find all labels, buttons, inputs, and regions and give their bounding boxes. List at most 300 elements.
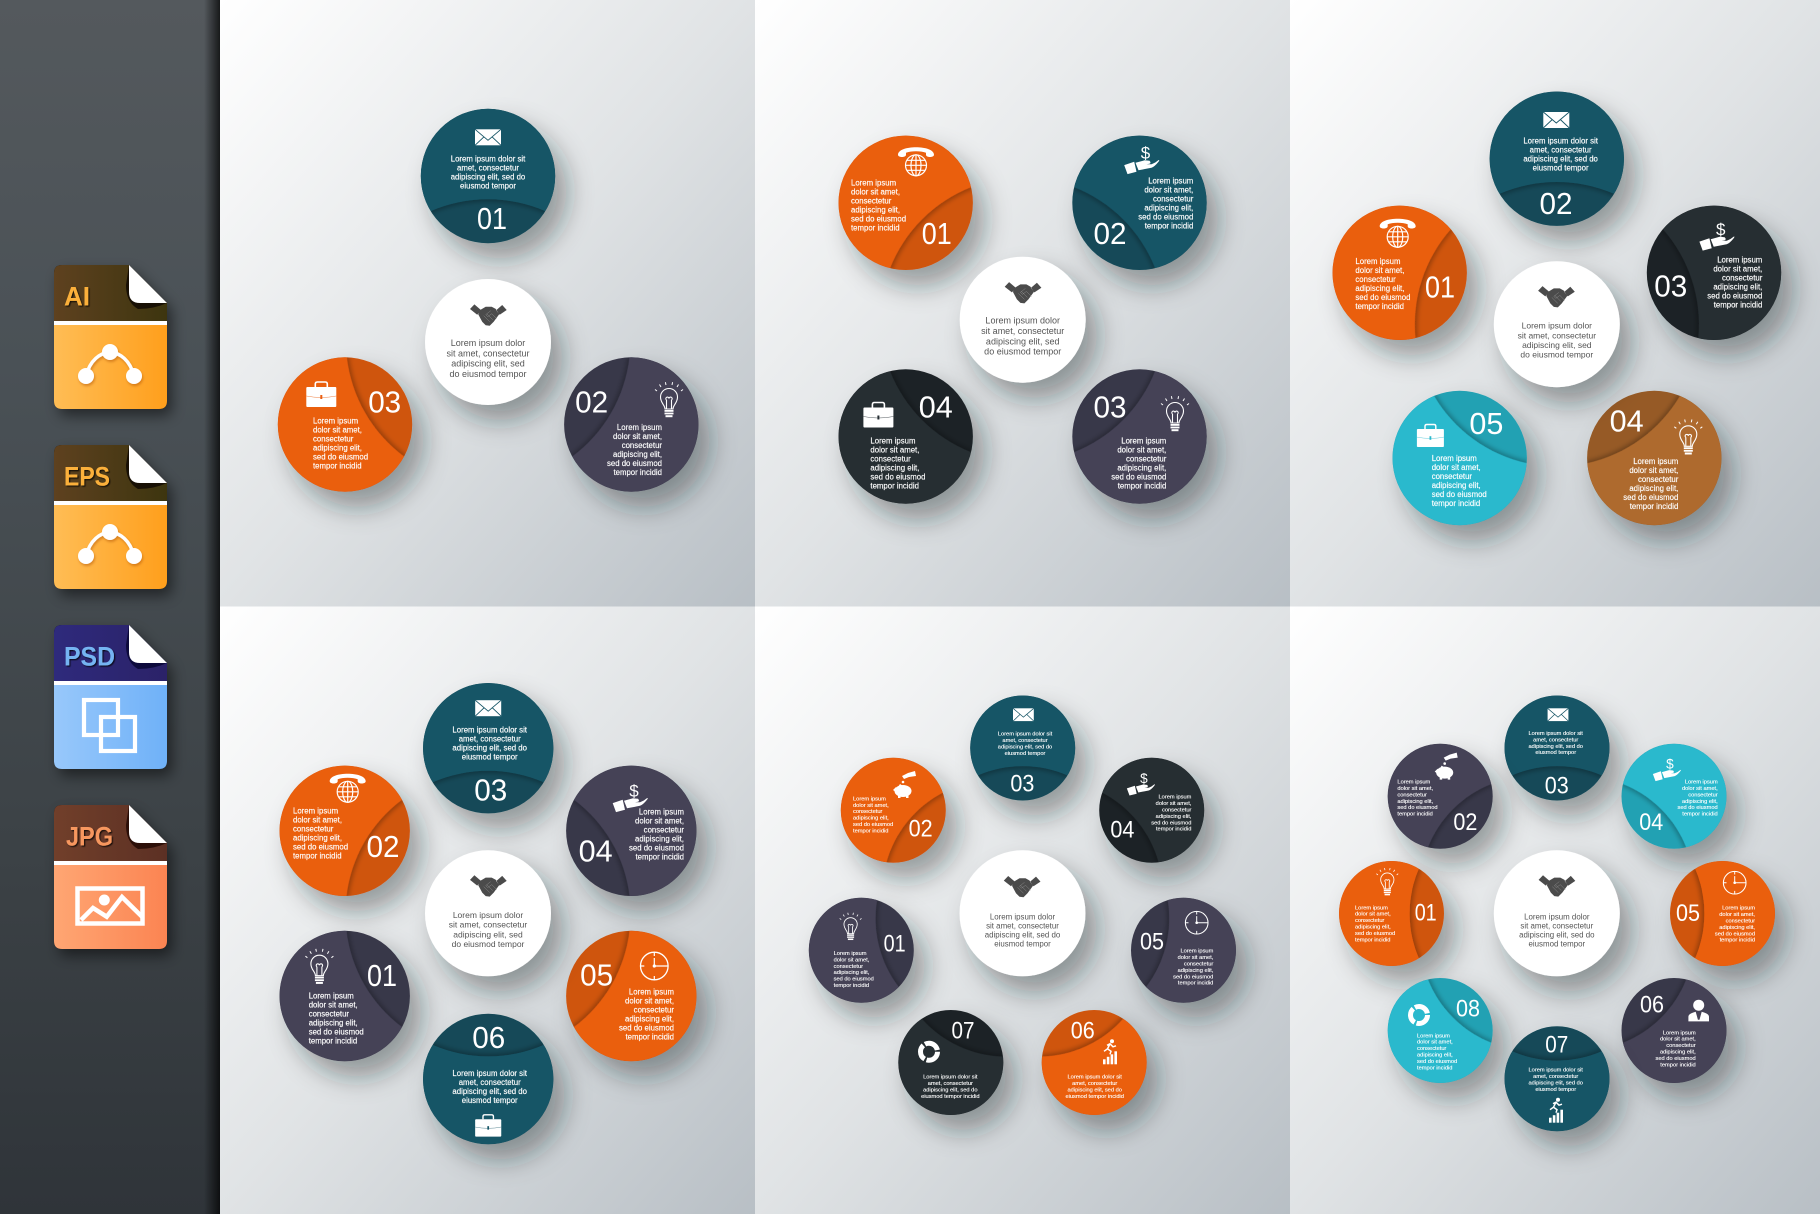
icon: cycle (1410, 1006, 1428, 1024)
text: tempor incidid (313, 461, 362, 470)
number: 02 (1453, 809, 1477, 836)
number: 03 (1010, 771, 1034, 798)
text: tempor incidid (613, 468, 662, 477)
text: do eiusmod tempor (984, 347, 1061, 357)
number: 05 (1676, 900, 1700, 927)
number: 02 (1540, 186, 1573, 221)
icon: hand with dollar (613, 782, 648, 812)
number: 06 (1640, 992, 1664, 1019)
text: consectetur (634, 1005, 674, 1014)
text: adipiscing elit, sed (1522, 340, 1592, 350)
text: adipiscing elit, sed do (1529, 1080, 1583, 1086)
text: amet, consectetur (457, 164, 519, 173)
icon: handshake (1539, 875, 1575, 897)
text: sed do eiusmod (313, 452, 368, 461)
text: dolor sit amet, (1417, 1040, 1453, 1046)
text: adipiscing elit, sed do (451, 173, 526, 182)
text: Lorem ipsum (1355, 905, 1388, 911)
number: 02 (367, 829, 400, 864)
icon: hand with dollar (1699, 220, 1734, 251)
text: adipiscing elit, (625, 1014, 674, 1023)
text: Lorem ipsum dolor (451, 338, 525, 348)
step 08 (1366, 974, 1497, 1105)
text: adipiscing elit, (1355, 284, 1404, 293)
text: tempor incidid (293, 851, 342, 860)
text: sed do eiusmod (1173, 974, 1213, 980)
text: amet, consectetur (459, 1078, 521, 1087)
text: adipiscing elit, (834, 970, 870, 976)
text: consectetur (853, 809, 883, 815)
text: eiusmod tempor (994, 939, 1051, 948)
text: Lorem ipsum (1663, 1030, 1696, 1036)
text: adipiscing elit, sed do (1068, 1088, 1122, 1094)
text: consectetur (313, 434, 354, 443)
text: Lorem ipsum dolor sit (1523, 137, 1599, 146)
text: Lorem ipsum dolor sit (451, 155, 526, 164)
step 02 (1490, 91, 1624, 226)
file icon: AI: AI (64, 282, 90, 312)
text: adipiscing elit, sed do (998, 744, 1052, 750)
text: sed do eiusmod (619, 1023, 674, 1032)
text: Lorem ipsum (1121, 437, 1166, 446)
icon: bulb (655, 382, 683, 417)
text: tempor incidid (870, 482, 919, 491)
step 01 (421, 109, 555, 243)
text: adipiscing elit, (1629, 484, 1678, 493)
text: Lorem ipsum (1685, 780, 1718, 786)
file icon: JPG: JPG (66, 822, 113, 852)
text: dolor sit amet, (613, 432, 662, 441)
text: adipiscing elit, sed do (985, 930, 1061, 939)
text: Lorem ipsum (617, 423, 662, 432)
text: consectetur (622, 441, 662, 450)
step 04 (1618, 722, 1748, 853)
text: Lorem ipsum (1717, 255, 1762, 264)
text: Lorem ipsum (1432, 454, 1477, 463)
text: dolor sit amet, (1719, 912, 1755, 918)
text: sit amet, consectetur (1520, 921, 1594, 930)
text: tempor incidid (851, 223, 900, 232)
text: Lorem ipsum dolor sit (998, 732, 1053, 738)
text: sit amet, consectetur (981, 326, 1064, 336)
number: 04 (1639, 809, 1663, 836)
step 05 (1131, 893, 1247, 1014)
text: tempor incidid (1720, 938, 1755, 944)
text: Lorem ipsum dolor sit (452, 726, 528, 735)
step 07 (881, 1010, 1010, 1132)
text: Lorem ipsum (834, 951, 867, 957)
text: dolor sit amet, (1117, 446, 1166, 455)
text: consectetur (1417, 1046, 1447, 1052)
text: consectetur (1432, 472, 1472, 481)
text: adipiscing elit, (613, 450, 662, 459)
icon: hand with dollar (1127, 771, 1155, 796)
text: tempor incidid (625, 1032, 674, 1041)
step 07 (1504, 1026, 1610, 1131)
text: tempor incidid (1714, 300, 1762, 309)
text: sit amet, consectetur (446, 348, 530, 358)
number: 03 (368, 385, 401, 420)
icon: briefcase (863, 402, 893, 428)
icon: briefcase (306, 382, 336, 407)
step 06 (1035, 1010, 1164, 1132)
text: adipiscing elit, (1397, 799, 1434, 805)
text: dolor sit amet, (1713, 264, 1762, 273)
step 03 (1647, 188, 1799, 348)
text: amet, consectetur (1072, 1081, 1117, 1087)
text: do eiusmod tempor (452, 939, 525, 949)
number: 02 (909, 816, 933, 843)
text: Lorem ipsum (1397, 780, 1431, 786)
icon: hand with dollar (1124, 144, 1159, 174)
text: dolor sit amet, (1660, 1037, 1696, 1043)
step 01 (811, 108, 978, 275)
text: Lorem ipsum dolor (985, 316, 1060, 326)
icon: handshake (1005, 282, 1041, 303)
number: 05 (580, 957, 613, 992)
text: sed do eiusmod (1432, 490, 1487, 499)
step 03 (1067, 364, 1235, 532)
text: adipiscing elit, sed (986, 336, 1059, 346)
text: Lorem ipsum dolor (1522, 321, 1592, 331)
text: tempor incidid (1682, 812, 1718, 818)
icon: clock (640, 952, 668, 980)
text: tempor incidid (1156, 827, 1191, 833)
text: tempor incidid (1118, 482, 1166, 491)
number: 03 (1545, 772, 1569, 799)
text: sed do eiusmod (607, 459, 662, 468)
text: adipiscing elit, (635, 834, 684, 843)
text: Lorem ipsum (639, 807, 684, 816)
number: 07 (1545, 1032, 1568, 1059)
text: sed do eiusmod (293, 842, 348, 851)
text: consectetur (1688, 792, 1718, 798)
icon: envelope (475, 700, 501, 716)
text: dolor sit amet, (635, 816, 684, 825)
number: 04 (1110, 817, 1134, 844)
file icon: JPG (54, 805, 167, 949)
text: tempor incidid (309, 1036, 357, 1045)
icon: runner (1103, 1039, 1117, 1064)
number: 05 (1140, 928, 1164, 955)
text: sed do eiusmod (309, 1027, 364, 1036)
number: 01 (922, 216, 952, 251)
icon: envelope (1013, 708, 1034, 721)
text: dolor sit amet, (1355, 912, 1391, 918)
step 04 (566, 742, 720, 904)
step 03 (970, 696, 1075, 800)
text: consectetur (1153, 195, 1194, 204)
text: tempor incidid (1145, 222, 1193, 231)
text: adipiscing elit, (1713, 282, 1762, 291)
text: dolor sit amet, (1156, 801, 1192, 807)
center circle (1494, 850, 1620, 976)
number: 04 (919, 389, 953, 424)
text: eiusmod tempor (1533, 164, 1589, 173)
text: Lorem ipsum (853, 796, 886, 802)
text: dolor sit amet, (851, 187, 900, 196)
step 04 (811, 364, 978, 532)
text: tempor incidid (1432, 499, 1480, 508)
text: consectetur (870, 455, 911, 464)
step 05 (1366, 390, 1535, 552)
text: Lorem ipsum (1417, 1033, 1450, 1039)
step 01 (256, 922, 410, 1085)
text: consectetur (309, 1009, 349, 1018)
file icon: PSD (54, 625, 167, 769)
icon: person (1688, 1000, 1709, 1021)
text: consectetur (1355, 275, 1396, 284)
text: adipiscing elit, (1355, 925, 1391, 930)
text: sed do eiusmod (1623, 493, 1678, 502)
text: Lorem ipsum (1722, 906, 1755, 912)
text: sit amet, consectetur (1518, 330, 1596, 340)
icon: piggy bank (1435, 753, 1458, 780)
icon: piggy bank (893, 771, 916, 798)
text: tempor incidid (1178, 981, 1213, 987)
text: Lorem ipsum dolor sit (452, 1069, 528, 1078)
number: 07 (951, 1018, 974, 1045)
text: tempor incidid (853, 828, 888, 834)
icon: bulb (840, 913, 862, 940)
file icon: EPS: EPS (64, 462, 110, 492)
text: consectetur (1355, 918, 1385, 924)
center circle (1494, 261, 1620, 387)
step 02 (1067, 108, 1235, 275)
text: dolor sit amet, (1629, 466, 1678, 475)
text: tempor incidid (1355, 302, 1404, 311)
step 04 (1579, 390, 1748, 552)
number: 03 (1654, 269, 1687, 304)
number: 08 (1456, 996, 1480, 1023)
text: eiusmod tempor (1535, 1087, 1576, 1093)
text: eiusmod tempor (462, 1096, 518, 1105)
text: dolor sit amet, (309, 1000, 358, 1009)
text: adipiscing elit, (1178, 968, 1214, 974)
number: 02 (575, 385, 608, 420)
text: sed do eiusmod (1355, 293, 1410, 302)
text: consectetur (1726, 918, 1755, 924)
number: 01 (477, 201, 507, 236)
text: do eiusmod tempor (1520, 350, 1593, 360)
text: Lorem ipsum (1633, 457, 1678, 466)
step 01 (1315, 188, 1467, 348)
text: sed do eiusmod (1111, 473, 1166, 482)
panel: eight steps (1290, 606, 1820, 1214)
text: consectetur (1184, 962, 1213, 968)
text: sed do eiusmod (1707, 291, 1762, 300)
text: amet, consectetur (1533, 1074, 1578, 1080)
text: adipiscing elit, sed do (452, 1087, 528, 1096)
text: sed do eiusmod (1355, 931, 1395, 937)
icon: briefcase (475, 1115, 501, 1137)
text: sed do eiusmod (1678, 805, 1718, 811)
text: consectetur (851, 196, 892, 205)
panel: sidebar (0, 0, 220, 1214)
text: sed do eiusmod (851, 214, 906, 223)
step 01 (798, 893, 914, 1014)
text: adipiscing elit, sed (453, 929, 523, 939)
text: adipiscing elit, sed do (452, 744, 528, 753)
text: sed do eiusmod (853, 822, 893, 828)
text: adipiscing elit, (853, 816, 889, 822)
number: 01 (884, 931, 906, 958)
panel: seven steps (755, 606, 1290, 1214)
icon: hand with dollar (1653, 757, 1681, 781)
text: Lorem ipsum (870, 437, 915, 446)
number: 04 (1610, 404, 1644, 439)
text: adipiscing elit, (1417, 1052, 1453, 1058)
text: adipiscing elit, (1719, 925, 1755, 931)
text: dolor sit amet, (853, 803, 889, 809)
text: tempor incidid (834, 983, 869, 989)
text: Lorem ipsum dolor sit (1068, 1075, 1122, 1081)
text: adipiscing elit, (1156, 814, 1192, 820)
step 03 (253, 349, 412, 516)
text: Lorem ipsum dolor (453, 910, 523, 920)
number: 06 (1071, 1018, 1095, 1045)
text: dolor sit amet, (1144, 186, 1193, 195)
text: tempor incidid (1355, 937, 1390, 943)
text: adipiscing elit, (293, 833, 342, 842)
text: dolor sit amet, (625, 996, 674, 1005)
icon: envelope (1548, 708, 1568, 721)
text: Lorem ipsum (851, 178, 896, 187)
step 06 (1618, 974, 1748, 1105)
text: adipiscing elit, (851, 205, 900, 214)
text: consectetur (644, 825, 684, 834)
text: Lorem ipsum dolor sit (1529, 731, 1583, 737)
text: amet, consectetur (1002, 738, 1048, 744)
icon: handshake (470, 304, 507, 326)
text: dolor sit amet, (1682, 786, 1718, 792)
text: Lorem ipsum (1148, 177, 1193, 186)
step 02 (1366, 722, 1497, 853)
step 02 (564, 349, 723, 516)
text: adipiscing elit, sed do (1519, 930, 1595, 939)
text: adipiscing elit, (1144, 204, 1193, 213)
text: consectetur (1638, 475, 1679, 484)
text: consectetur (1126, 455, 1167, 464)
text: sed do eiusmod (629, 843, 684, 852)
text: consectetur (293, 824, 334, 833)
text: Lorem ipsum (629, 987, 674, 996)
text: dolor sit amet, (834, 957, 870, 963)
text: Lorem ipsum (1159, 795, 1192, 801)
text: eiusmod tempor (460, 182, 516, 191)
text: adipiscing elit, (313, 443, 362, 452)
text: consectetur (1162, 808, 1192, 814)
text: eiusmod tempor (1535, 750, 1576, 756)
text: tempor incidid (1660, 1062, 1696, 1068)
icon: handshake (1004, 876, 1040, 897)
text: Lorem ipsum (1180, 949, 1214, 955)
number: 03 (474, 773, 507, 808)
text: sit amet, consectetur (449, 920, 527, 930)
text: dolor sit amet, (1355, 266, 1404, 275)
text: Lorem ipsum dolor (1524, 912, 1590, 921)
text: sed do eiusmod (870, 473, 925, 482)
file icon: EPS (54, 445, 167, 589)
text: consectetur (1722, 273, 1763, 282)
icon: envelope (475, 129, 501, 145)
text: sed do eiusmod (1417, 1059, 1457, 1065)
text: adipiscing elit, (309, 1018, 358, 1027)
step 05 (1670, 861, 1775, 966)
step 05 (566, 922, 720, 1085)
icon: phone (1380, 219, 1416, 247)
text: dolor sit amet, (1432, 463, 1481, 472)
center circle (425, 279, 551, 405)
text: sed do eiusmod (1138, 213, 1193, 222)
text: Lorem ipsum dolor sit (923, 1075, 978, 1081)
number: 06 (472, 1020, 505, 1055)
text: adipiscing elit, (1432, 481, 1481, 490)
text: Lorem ipsum (309, 991, 354, 1000)
text: sed do eiusmod (1397, 805, 1438, 811)
icon: bulb (1161, 396, 1189, 431)
number: 03 (1094, 389, 1126, 424)
text: adipiscing elit, sed do (1523, 155, 1599, 164)
icon: phone (898, 147, 934, 176)
number: 02 (1094, 216, 1126, 251)
text: consectetur (1397, 792, 1427, 798)
panel: three steps (220, 0, 755, 606)
text: do eiusmod tempor (449, 369, 527, 379)
icon: clock (1185, 911, 1208, 934)
text: adipiscing elit, (1117, 464, 1166, 473)
text: dolor sit amet, (1397, 786, 1434, 792)
text: tempor incidid (635, 852, 684, 861)
center circle (960, 257, 1086, 383)
panel: four steps (755, 0, 1290, 606)
text: eiusmod tempor incidid (1065, 1094, 1124, 1100)
step 03 (1504, 696, 1610, 800)
icon: bulb (305, 949, 333, 984)
text: consectetur (1666, 1043, 1696, 1049)
icon: cycle (920, 1043, 938, 1060)
text: sed do eiusmod (1151, 820, 1191, 826)
text: tempor incidid (1417, 1065, 1452, 1071)
text: eiusmod tempor (1529, 939, 1585, 948)
text: adipiscing elit, (1660, 1050, 1696, 1056)
text: sed do eiusmod (834, 977, 874, 983)
text: dolor sit amet, (870, 446, 919, 455)
icon: briefcase (1417, 424, 1444, 447)
icon: runner (1549, 1098, 1563, 1123)
text: dolor sit amet, (293, 815, 342, 824)
number: 01 (1415, 900, 1437, 927)
icon: handshake (470, 875, 507, 897)
number: 01 (367, 958, 397, 993)
icon: phone (330, 774, 366, 802)
number: 01 (1425, 269, 1455, 304)
text: adipiscing elit, sed do (1529, 744, 1583, 750)
text: dolor sit amet, (313, 425, 362, 434)
step 02 (256, 742, 410, 904)
icon: bulb (1376, 868, 1398, 895)
panel: five steps (1290, 0, 1820, 606)
text: sed do eiusmod (1656, 1056, 1696, 1062)
text: amet, consectetur (1533, 737, 1578, 743)
icon: envelope (1543, 112, 1569, 128)
text: adipiscing elit, sed do (923, 1088, 977, 1094)
text: sit amet, consectetur (986, 921, 1059, 930)
step 02 (819, 736, 948, 868)
text: Lorem ipsum dolor sit (1529, 1068, 1583, 1074)
file icon: AI (54, 265, 167, 409)
text: amet, consectetur (928, 1081, 973, 1087)
